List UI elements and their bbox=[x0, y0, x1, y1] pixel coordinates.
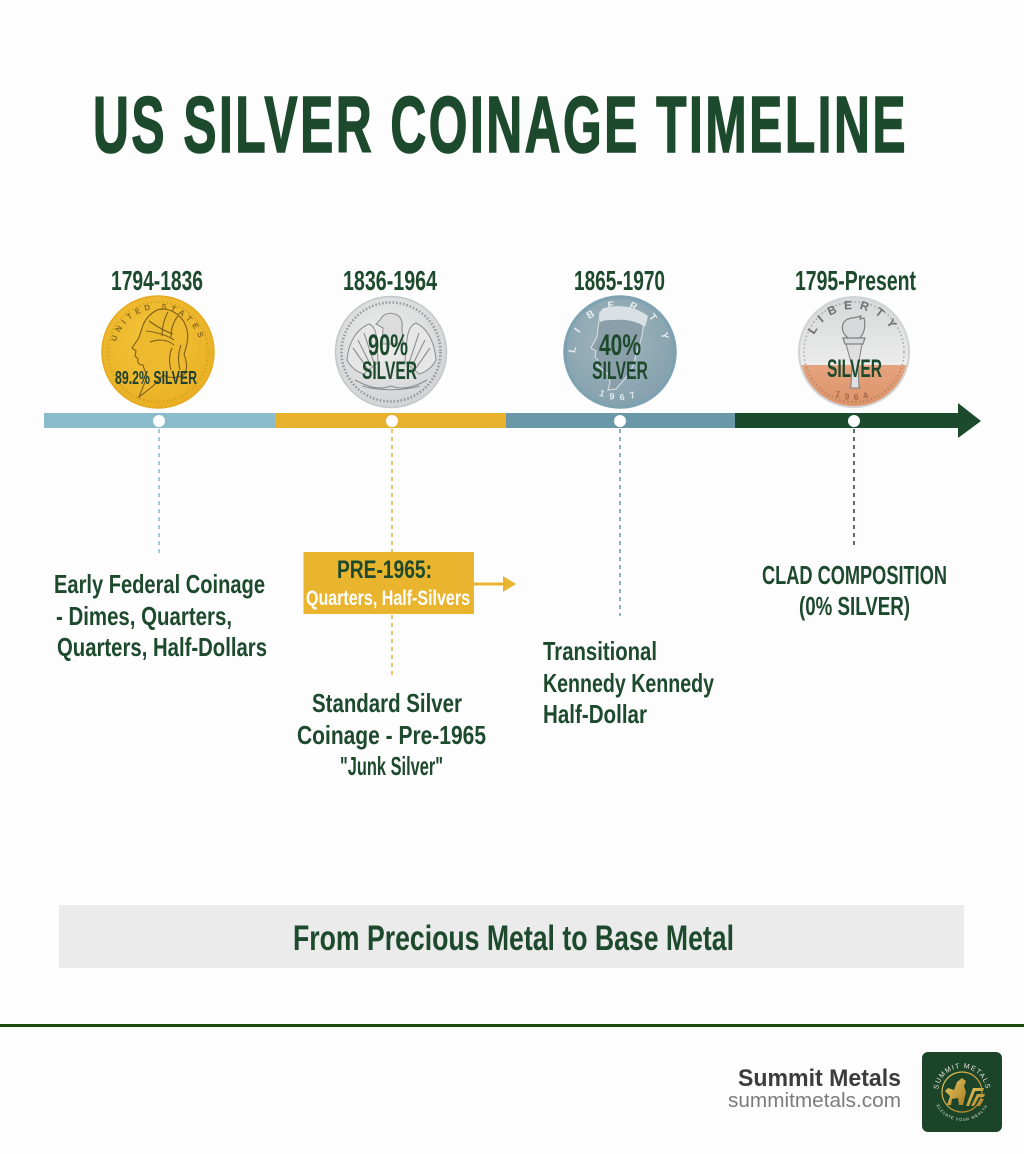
callout: pre-1965: Quarters, Half-Silvers bbox=[306, 587, 470, 610]
text block: transitional Kennedy half-dollar: Transitional bbox=[543, 636, 657, 666]
text block: standard silver coinage: Standard Silver bbox=[312, 688, 462, 718]
text block: early federal coinage bbox=[54, 569, 267, 662]
coin: 89.2% silver gold coin: 89.2% SILVER bbox=[115, 368, 197, 388]
coin: clad composition torch coin: SILVER bbox=[827, 355, 882, 383]
dashed connectors bbox=[159, 429, 854, 675]
era date labels bbox=[111, 265, 916, 296]
coin: 89.2% silver gold coin: UNITED STATES bbox=[111, 304, 204, 341]
icon: Summit Metals logo: ELEVATE YOUR WEALTH bbox=[936, 1104, 987, 1121]
coin: clad composition torch coin: LIBERTY bbox=[807, 300, 898, 334]
text block: transitional Kennedy half-dollar: Kennedy Kennedy bbox=[543, 668, 714, 698]
text block: transitional Kennedy half-dollar: Half-Dollar bbox=[543, 699, 647, 729]
coin: 40% silver Kennedy coin: 1967 bbox=[599, 390, 634, 400]
coin: 90% silver eagle coin bbox=[336, 296, 446, 408]
text block: standard silver coinage: Coinage - Pre-1965 bbox=[297, 720, 486, 750]
brand name and URL: Summit Metals bbox=[738, 1065, 901, 1092]
summary banner: From Precious Metal to Base Metal bbox=[293, 919, 734, 958]
coin: 40% silver Kennedy coin: 40% bbox=[599, 329, 641, 362]
timeline bar with arrow bbox=[44, 403, 981, 438]
text block: clad composition: CLAD COMPOSITION bbox=[762, 560, 947, 590]
text block: transitional Kennedy half-dollar bbox=[543, 636, 714, 729]
text block: clad composition: (0% SILVER) bbox=[799, 591, 910, 621]
brand name and URL: summitmetals.com bbox=[728, 1090, 901, 1112]
coin: 40% silver Kennedy coin: LIBERTY bbox=[568, 301, 669, 353]
brand name and URL bbox=[728, 1065, 901, 1112]
coin: 40% silver Kennedy coin: SILVER bbox=[592, 357, 648, 385]
coin: clad composition torch coin bbox=[798, 296, 910, 408]
era date labels: 1865-1970 bbox=[574, 265, 665, 296]
coin: 40% silver Kennedy coin bbox=[563, 295, 677, 409]
coin: 90% silver eagle coin: SILVER bbox=[362, 357, 417, 385]
footer rule bbox=[0, 1024, 1024, 1027]
era date labels: 1836-1964 bbox=[343, 265, 437, 296]
summary banner bbox=[59, 905, 964, 968]
era date labels: 1795-Present bbox=[795, 265, 916, 296]
text block: early federal coinage: Quarters, Half-Dollars bbox=[57, 632, 267, 662]
text block: clad composition bbox=[762, 560, 947, 621]
callout: pre-1965: PRE-1965: bbox=[337, 556, 432, 584]
text block: standard silver coinage bbox=[297, 688, 486, 781]
coin: 90% silver eagle coin: 90% bbox=[368, 329, 408, 362]
icon: Summit Metals logo: SUMMIT METALS bbox=[934, 1063, 990, 1090]
text block: early federal coinage: - Dimes, Quarters, bbox=[56, 601, 232, 631]
text block: standard silver coinage: "Junk Silver" bbox=[340, 751, 443, 781]
callout: pre-1965 bbox=[304, 552, 516, 614]
coin: 89.2% silver gold coin bbox=[101, 295, 215, 409]
era date labels: 1794-1836 bbox=[111, 265, 203, 296]
coin: clad composition torch coin: 1964 bbox=[835, 391, 868, 400]
icon: Summit Metals logo bbox=[922, 1052, 1002, 1132]
text block: early federal coinage: Early Federal Coinage bbox=[54, 569, 265, 599]
